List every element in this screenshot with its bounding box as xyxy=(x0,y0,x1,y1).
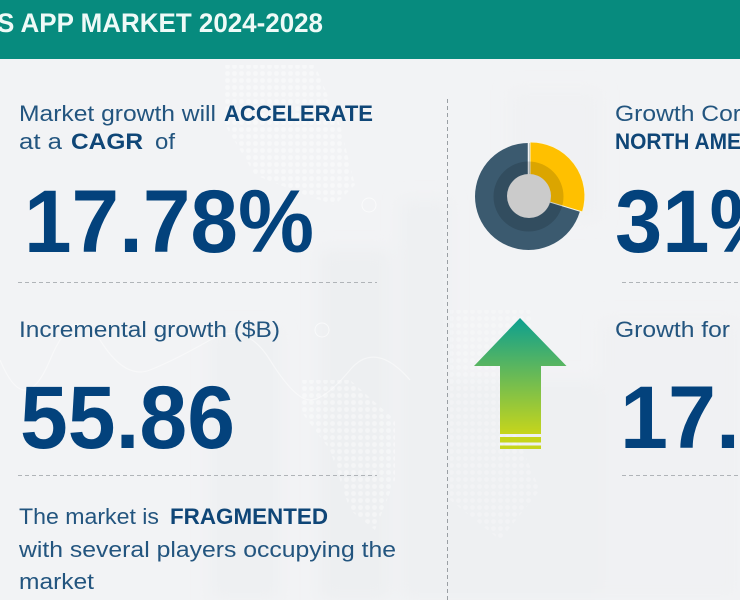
panel: market fragmentation text: The market is xyxy=(19,504,159,529)
CAGR description: of xyxy=(155,129,176,154)
panel: market fragmentation text xyxy=(18,504,396,594)
North America label xyxy=(615,101,740,154)
incremental growth label: Incremental growth ($B) xyxy=(19,317,280,342)
segment growth label: Growth for xyxy=(615,317,730,342)
panel: CAGR xyxy=(19,101,373,271)
incremental growth value: 55.86 xyxy=(20,367,235,467)
panel: incremental growth xyxy=(19,317,280,467)
panel: market fragmentation text: FRAGMENTED xyxy=(170,504,328,529)
CAGR description: Market growth will xyxy=(19,101,216,126)
panel: market fragmentation text: market xyxy=(19,569,94,594)
North America label: Growth Cor xyxy=(615,101,740,126)
CAGR value: 17.78% xyxy=(24,171,314,271)
icon: up arrow xyxy=(474,318,566,449)
CAGR description: CAGR xyxy=(71,129,143,154)
header title: S APP MARKET 2024-2028 xyxy=(0,8,323,38)
panel: market fragmentation text: with several players occupying the xyxy=(18,537,396,562)
CAGR description xyxy=(19,101,373,154)
CAGR description: ACCELERATE xyxy=(224,101,373,126)
panel: North America growth xyxy=(615,101,740,271)
CAGR description: at a xyxy=(19,129,63,154)
header band xyxy=(0,0,740,59)
icon: donut chart xyxy=(475,142,585,250)
panel: segment growth xyxy=(615,317,740,467)
